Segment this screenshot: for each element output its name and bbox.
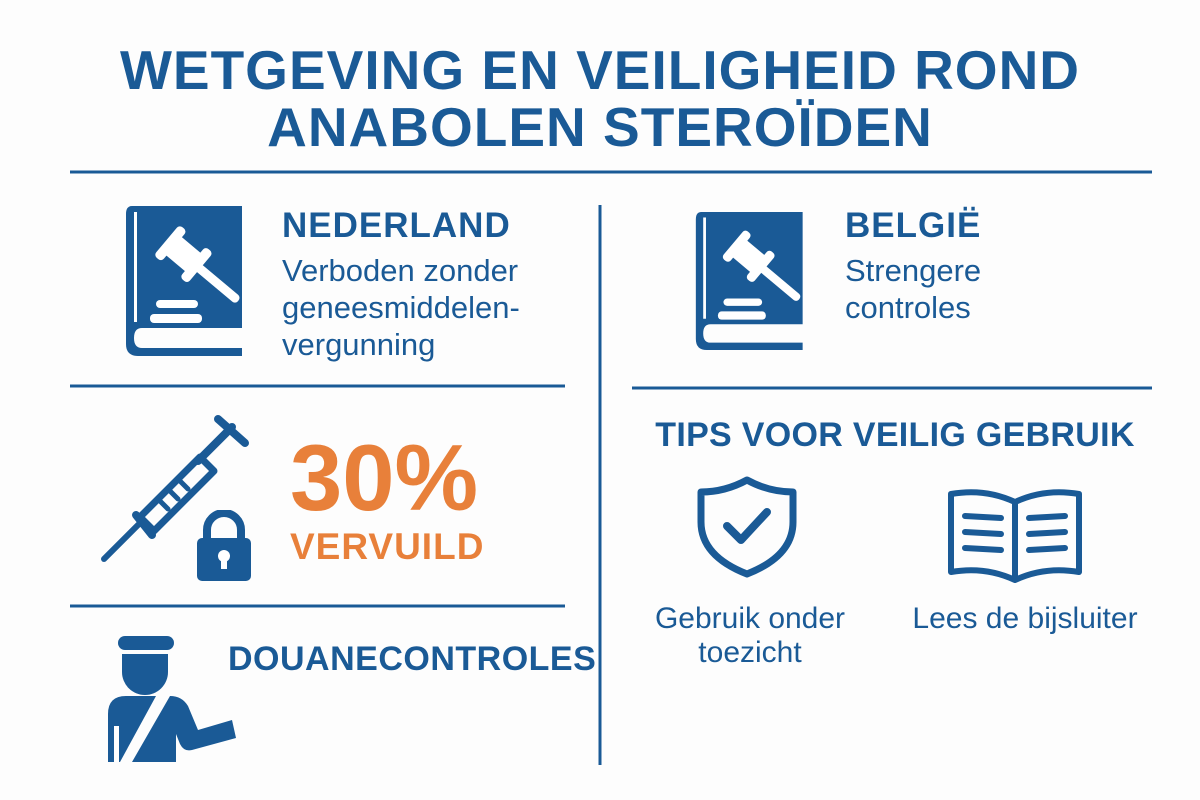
icon: law book Nederland	[126, 206, 242, 356]
text: gebruik onder toezicht: Gebruik onder	[655, 602, 845, 635]
text: Belgie	[845, 253, 981, 325]
title	[120, 39, 1080, 158]
text: lees de bijsluiter: Lees de bijsluiter	[912, 602, 1138, 635]
icon: law book Belgie	[696, 212, 803, 350]
icon: open book	[948, 489, 1082, 583]
icon: padlock	[197, 510, 251, 581]
text: Belgie: Strengere	[845, 253, 981, 288]
heading: Belgie: BELGIË	[845, 206, 981, 245]
stat: 30% vervuild: 30%	[290, 425, 478, 530]
heading: Nederland: NEDERLAND	[282, 206, 511, 245]
text: Belgie: controles	[845, 290, 971, 325]
heading: tips: TIPS VOOR VEILIG GEBRUIK	[655, 416, 1135, 454]
title: ANABOLEN STEROÏDEN	[267, 96, 933, 158]
text: Nederland: vergunning	[282, 327, 435, 362]
icon: shield check	[698, 476, 796, 578]
stat: 30% vervuild: VERVUILD	[290, 526, 484, 567]
text: Nederland: geneesmiddelen-	[282, 290, 520, 325]
text: gebruik onder toezicht	[655, 602, 845, 669]
heading: Douanecontroles: DOUANECONTROLES	[228, 640, 596, 678]
text: Nederland	[282, 253, 520, 362]
icon: syringe	[101, 415, 249, 562]
text: Nederland: Verboden zonder	[282, 253, 518, 288]
text: gebruik onder toezicht: toezicht	[698, 636, 802, 669]
icon: customs officer	[108, 636, 236, 762]
title: WETGEVING EN VEILIGHEID ROND	[120, 39, 1080, 101]
